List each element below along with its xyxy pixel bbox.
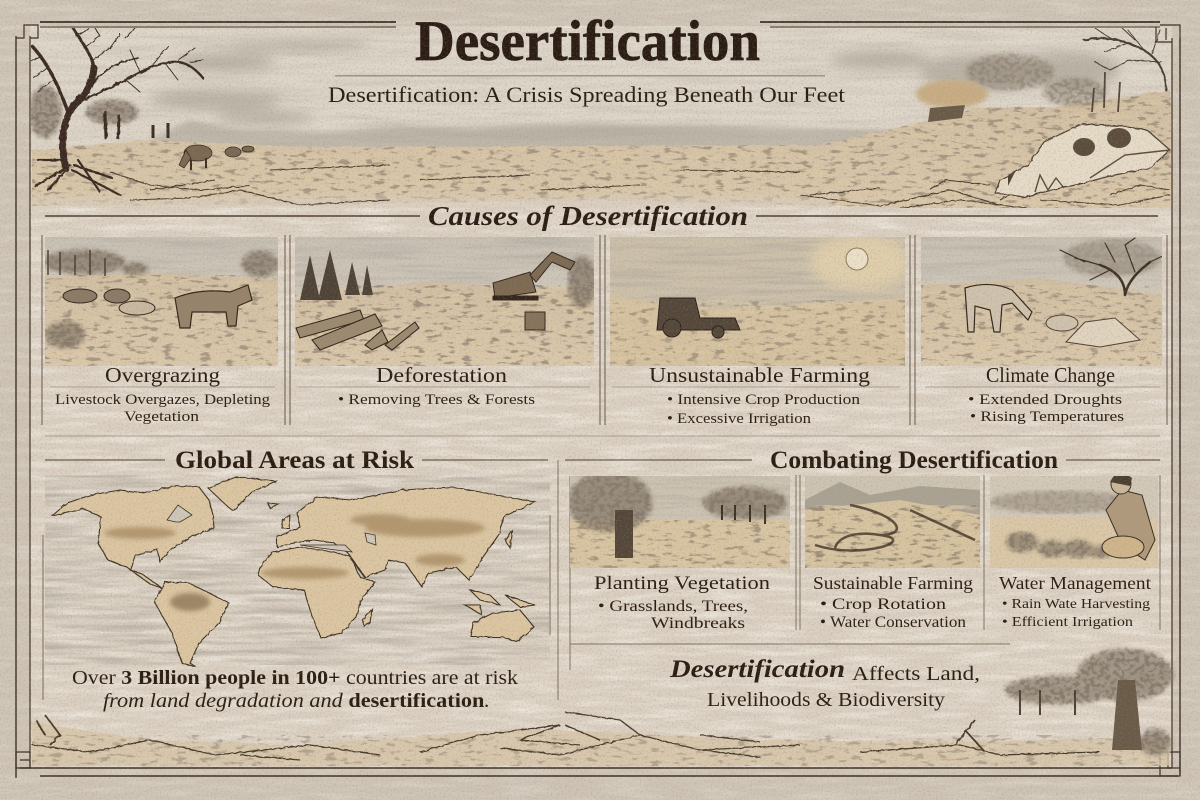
continent: north america (52, 486, 214, 588)
illustration: regrowing woodland (1005, 649, 1173, 755)
label: sustainable farming: Sustainable Farming (813, 573, 973, 593)
icon: ground shrubs and cracks left (110, 165, 1170, 210)
panel: unsustainable farming (610, 234, 910, 427)
heading: causes: Causes of Desertification (428, 201, 748, 231)
label: water management: Water Management (999, 573, 1151, 593)
continent: greenland (208, 477, 276, 511)
icon: grazing animal (179, 145, 254, 170)
illustration: logged forest (295, 237, 596, 366)
text: deforestation detail: • Removing Trees & Forests (338, 392, 535, 408)
panel: hero landscape (25, 20, 1171, 210)
text: planting detail: • Grasslands, Trees, (598, 598, 748, 615)
text: farming detail: • Intensive Crop Production (667, 392, 861, 408)
panel: combating desertification (558, 447, 1160, 711)
illustration: gaunt cow and bones (921, 237, 1165, 366)
heading: global areas: Global Areas at Risk (175, 447, 414, 474)
continent: australia (471, 610, 534, 642)
panel: deforestation (295, 237, 596, 408)
illustration: farmer watering seedlings (990, 474, 1158, 568)
text: farming practices: • Water Conservation (820, 614, 966, 631)
label: unsustainable farming: Unsustainable Farming (649, 363, 871, 387)
text: closing statement: Desertification (669, 656, 845, 683)
label: planting: Planting Vegetation (594, 573, 771, 594)
icon: distant burnt trees (916, 54, 1120, 122)
illustration: planted trees (568, 472, 790, 568)
text: closing statement (669, 656, 980, 711)
text: farming detail: • Excessive Irrigation (667, 411, 812, 427)
world map (45, 475, 550, 667)
illustration: cattle on pasture (45, 237, 278, 366)
text: risk statement: from land degradation and desertification . (103, 690, 490, 712)
text: risk statement (72, 667, 519, 712)
text: planting detail (598, 598, 748, 632)
text: water practices: • Rain Wate Harvesting (1002, 597, 1150, 612)
card: water management (990, 474, 1158, 630)
continent: africa (258, 547, 375, 638)
text: climate detail: • Rising Temperatures (970, 409, 1124, 425)
label: overgrazing: Overgrazing (105, 363, 221, 387)
panel dividers: causes (42, 235, 1167, 436)
icon: bare tree right (1084, 26, 1166, 90)
text: planting detail: Windbreaks (651, 615, 745, 632)
card: sustainable farming (805, 476, 980, 631)
text: overgrazing detail (55, 392, 271, 425)
text: farming practices (820, 596, 966, 631)
continent: eurasia (277, 487, 535, 587)
text: risk statement: Over 3 Billion people in 100+ countries are at risk (72, 667, 519, 689)
text: overgrazing detail: Vegetation (124, 409, 200, 425)
continent: south america (155, 582, 229, 667)
arid zones (104, 514, 485, 611)
text: farming practices: • Crop Rotation (820, 596, 946, 613)
title: Desertification (415, 10, 760, 73)
text: closing statement: Livelihoods & Biodiversity (707, 689, 945, 711)
islands (268, 503, 535, 626)
text: water practices: • Efficient Irrigation (1002, 615, 1133, 630)
panel: climate change (921, 237, 1165, 425)
subtitle: Desertification: A Crisis Spreading Beneath Our Feet (328, 82, 845, 107)
text: climate detail (968, 392, 1124, 425)
text: overgrazing detail: Livestock Overgazes, Depleting (55, 392, 271, 408)
text: water practices (1002, 597, 1150, 630)
panel: overgrazing (45, 237, 278, 425)
label: climate change: Climate Change (986, 363, 1115, 387)
illustration: tractor under hot sun (610, 234, 910, 366)
panel: global areas at risk (43, 447, 550, 712)
icon: animal skull (995, 124, 1170, 197)
text: climate detail: • Extended Droughts (968, 392, 1122, 408)
icon: tree foliage left (29, 86, 138, 138)
label: deforestation: Deforestation (376, 363, 508, 387)
card: planting vegetation (568, 472, 790, 632)
heading: combating: Combating Desertification (770, 447, 1058, 474)
text: closing statement: Affects Land, (852, 663, 980, 685)
inland seas (167, 505, 376, 578)
illustration: terraced fields (805, 476, 980, 568)
text: farming detail (667, 392, 861, 427)
illustration: cracked earth footer (32, 712, 1170, 766)
icon: bare tree left (25, 20, 203, 195)
